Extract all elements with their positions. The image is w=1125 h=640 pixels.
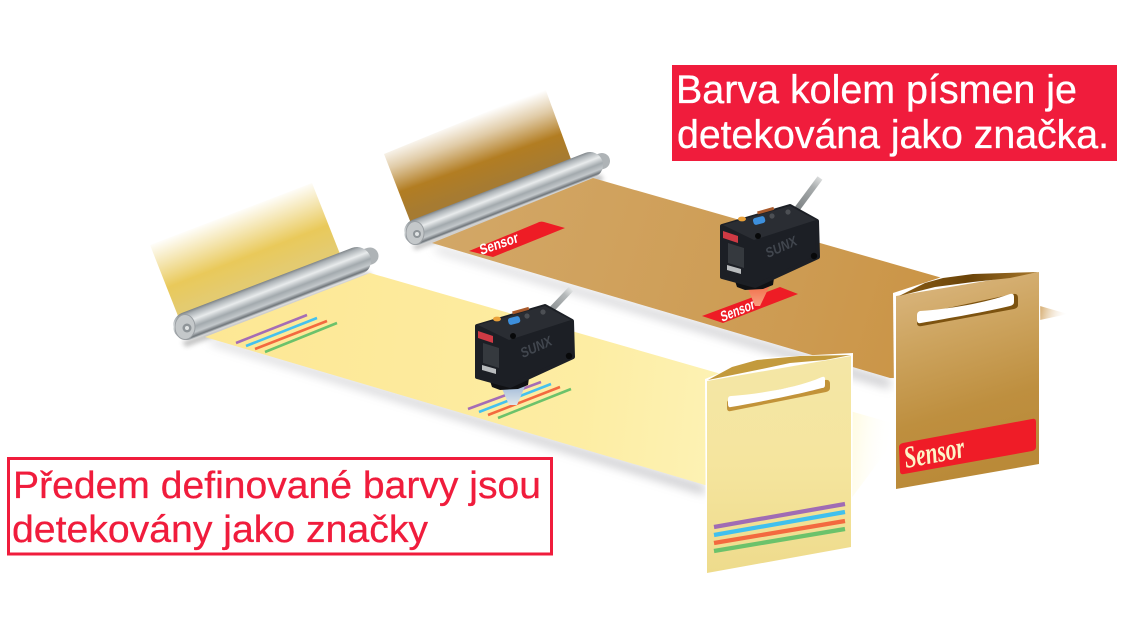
colour stripes on yellow web near roller: [236, 315, 337, 352]
red Sensor label under brown sensor: Sensor: [719, 297, 757, 326]
SUNX logo: SUNX: [518, 332, 556, 361]
callout: yellow case: detekovány jako značky: [12, 509, 428, 551]
brown paper flap behind roller: [384, 88, 572, 226]
sensor cable: [552, 289, 571, 309]
callout: brown case: Barva kolem písmen je: [676, 68, 1077, 112]
sensor body silhouette: [477, 306, 573, 386]
sensor cable: [797, 178, 820, 209]
brown web tail fading out: [1040, 306, 1068, 320]
yellow paper flap behind roller: [150, 183, 340, 321]
brown roller: [406, 161, 602, 244]
SUNX logo: SUNX: [763, 232, 801, 261]
bag red Sensor label: Sensor: [901, 429, 968, 475]
callout: brown case: [672, 65, 1117, 161]
yellow roller: [175, 256, 370, 340]
sensor front label: [723, 231, 744, 274]
bag white rim: [893, 270, 1041, 491]
sensor controls: [493, 307, 546, 325]
shadow under brown web: [432, 246, 890, 388]
sensor front label: [478, 331, 499, 374]
sensor nozzle: [489, 378, 529, 390]
brown-line sensor: [722, 178, 820, 306]
yellow shopping bag: [705, 353, 853, 574]
bag body: [707, 356, 851, 573]
shadow below yellow roller: [182, 272, 372, 347]
brown paper web: [432, 178, 1040, 380]
sensor body silhouette: [722, 206, 818, 286]
shadow below brown roller: [412, 174, 604, 250]
yellow-line sensor: [477, 289, 573, 405]
callout: brown case: detekována jako značka.: [677, 113, 1109, 157]
bag handle hole: [727, 377, 830, 411]
brown shopping bag: [893, 270, 1041, 491]
callout: yellow case: Předem definované barvy jsou: [13, 465, 541, 507]
red Sensor label under brown sensor: [702, 287, 798, 326]
sensor light cone: [500, 384, 526, 405]
sensor top face: [723, 206, 816, 240]
shadow under yellow web: [205, 337, 705, 494]
colour stripes under yellow sensor: [468, 382, 571, 418]
bag body: [896, 272, 1039, 489]
bag colour stripes: [714, 504, 845, 551]
red Sensor label on brown web: Sensor: [478, 230, 520, 259]
sensor controls: [738, 207, 791, 225]
callout: yellow case: [8, 458, 552, 554]
bag opening: [899, 272, 1038, 296]
sensor light cone: [746, 283, 771, 306]
bag white rim: [705, 353, 853, 574]
bag red Sensor label: [899, 419, 1036, 475]
sensor nozzle: [734, 278, 774, 290]
red Sensor label on brown web: [469, 222, 565, 259]
bag opening: [708, 355, 851, 380]
yellow paper web: [205, 273, 895, 500]
sensor top face: [478, 306, 571, 340]
bag handle hole: [917, 294, 1018, 326]
